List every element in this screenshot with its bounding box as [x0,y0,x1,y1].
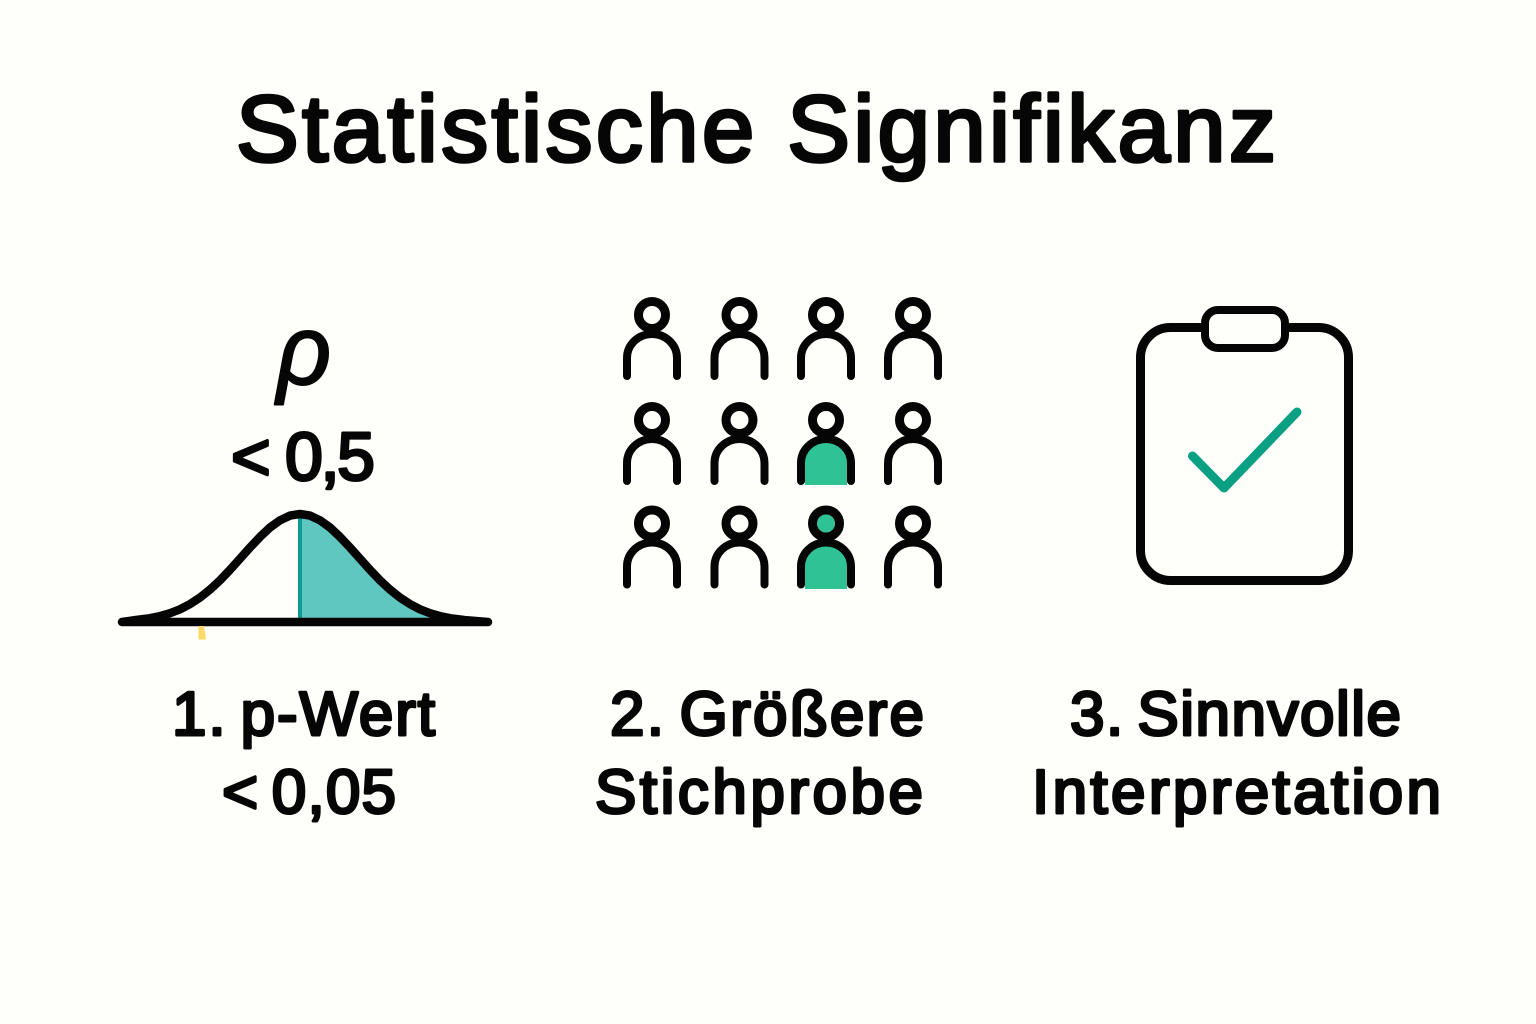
title: Statistische Signifikanz [236,76,1276,181]
icon: clipboard [1140,310,1348,580]
label 1: < 0,05 [222,758,396,827]
check mark [1192,412,1297,488]
label 2: 2. Größere [610,680,924,749]
threshold: less than 0,5: < 0,5 [231,419,375,495]
chart: bell curve [122,514,488,640]
mean line [298,518,302,618]
icon: people grid [627,302,938,589]
label 2 [595,680,924,827]
label 1: 1. p-Wert [172,680,435,749]
people row 2 [627,406,938,481]
label 3: 3. Sinnvolle [1070,680,1401,749]
label 2: Stichprobe [595,758,923,827]
highlighted body fills [805,438,847,589]
panel: p-Wert [122,295,488,827]
curve and axis [122,514,488,622]
people row 3 [627,510,938,584]
panel: Stichprobe [595,302,938,827]
label 1 [172,680,435,827]
label 3: Interpretation [1032,758,1441,827]
people row 1 [627,302,938,376]
clipboard clip [1205,310,1285,348]
panel: Interpretation [1032,310,1441,827]
highlighted head [817,514,835,532]
symbol: p: ρ [274,295,331,405]
label 3 [1032,680,1441,827]
clipboard board [1140,328,1348,580]
yellow tick [198,626,206,640]
shaded area under the curve [299,515,440,618]
